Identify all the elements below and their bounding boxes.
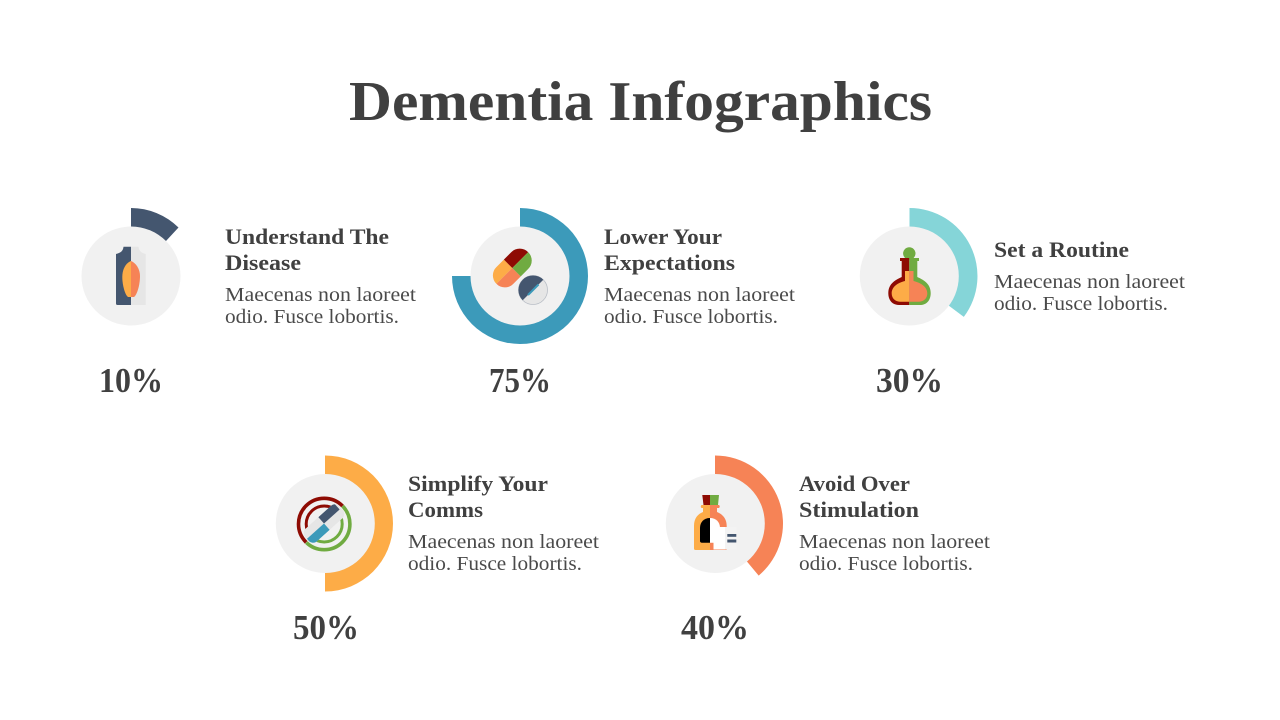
description: odio. Fusce lobortis.: [225, 306, 399, 328]
percentage: 40%: [681, 608, 749, 647]
heading: [799, 471, 919, 522]
heading: Comms: [408, 497, 483, 522]
heading: Expectations: [604, 250, 735, 275]
panel: lower your expectations: [452, 208, 795, 400]
progress ring: 50%: [325, 456, 393, 592]
title: Dementia Infographics: [349, 71, 932, 133]
icon backdrop: [82, 226, 180, 326]
description: odio. Fusce lobortis.: [408, 553, 582, 575]
heading: Disease: [225, 250, 301, 275]
description: [408, 531, 599, 575]
progress ring: 40%: [715, 456, 783, 576]
icon: medicine bottle: [694, 495, 736, 550]
heading: [604, 224, 735, 275]
panel: understand the disease: [82, 208, 416, 400]
heading: Simplify Your: [408, 471, 548, 496]
description: Maecenas non laoreet: [994, 271, 1185, 293]
percentage: 30%: [876, 361, 943, 400]
icon backdrop: [860, 226, 959, 326]
panel: simplify your comms: [276, 456, 599, 647]
icon backdrop: [276, 474, 375, 573]
description: [604, 284, 795, 328]
icon backdrop: [470, 226, 570, 326]
icon: flask: [888, 247, 931, 305]
icon: organ in body: [116, 247, 146, 305]
percentage: 75%: [489, 361, 551, 400]
percentage: 10%: [99, 361, 163, 400]
description: odio. Fusce lobortis.: [604, 306, 778, 328]
panel: avoid over stimulation: [666, 456, 990, 647]
heading: Lower Your: [604, 224, 722, 249]
percentage: 50%: [293, 608, 359, 647]
description: odio. Fusce lobortis.: [994, 293, 1168, 315]
heading: Avoid Over: [799, 471, 910, 496]
heading: Set a Routine: [994, 237, 1129, 262]
description: Maecenas non laoreet: [225, 284, 416, 306]
description: [799, 531, 990, 575]
heading: [225, 224, 389, 275]
panel: set a routine: [860, 208, 1185, 400]
progress ring: 30%: [910, 208, 977, 317]
heading: [408, 471, 548, 522]
icon backdrop: [666, 474, 765, 573]
description: Maecenas non laoreet: [408, 531, 599, 553]
description: odio. Fusce lobortis.: [799, 553, 973, 575]
icon: capsule and pill: [492, 248, 548, 305]
progress ring: 10%: [131, 208, 178, 241]
heading: Understand The: [225, 224, 389, 249]
description: Maecenas non laoreet: [604, 284, 795, 306]
description: Maecenas non laoreet: [799, 531, 990, 553]
heading: Stimulation: [799, 497, 919, 522]
description: [994, 271, 1185, 315]
progress ring: 75%: [452, 208, 588, 344]
description: [225, 284, 416, 328]
icon: rings and capsule: [298, 498, 350, 550]
